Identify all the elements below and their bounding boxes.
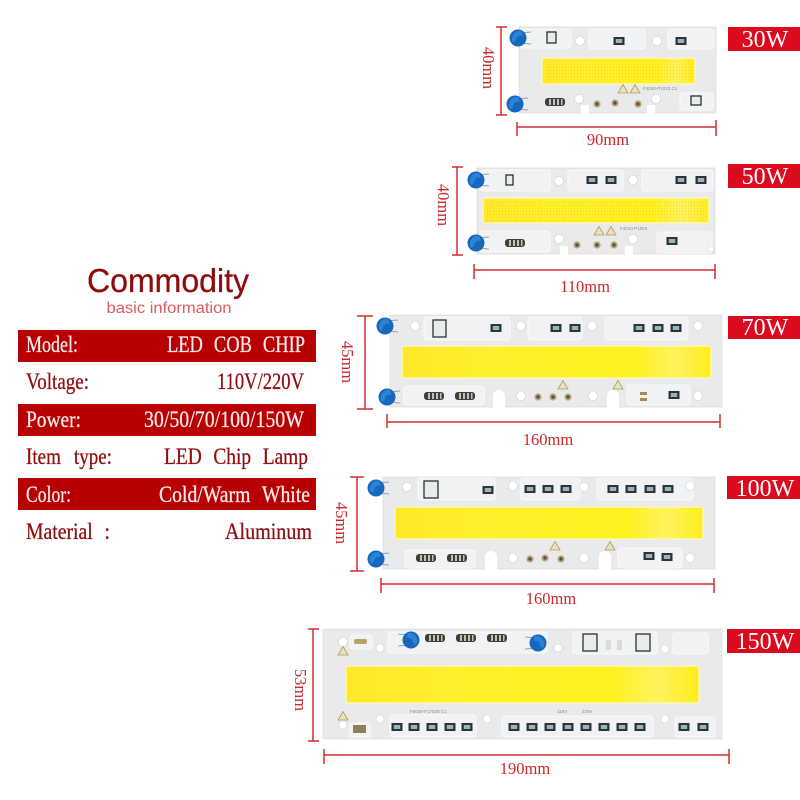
capacitors	[376, 318, 400, 406]
row: item type: LED Chip Lamp	[164, 444, 308, 469]
row: model: LED COB CHIP	[167, 332, 305, 357]
capacitors	[468, 172, 489, 252]
row: model	[18, 330, 316, 362]
panel: 100W chip	[332, 476, 800, 608]
row: power: Power:	[26, 407, 81, 432]
board	[383, 477, 715, 569]
capacitors	[368, 480, 389, 568]
dimension: width	[474, 264, 715, 296]
panel: 30W chip	[479, 27, 800, 149]
dimension: width: 110mm	[560, 277, 610, 296]
capacitors	[506, 30, 531, 112]
dimension: height: 45mm	[332, 502, 351, 544]
board	[477, 168, 715, 254]
LED strip	[346, 666, 699, 703]
power label: 70W	[742, 315, 789, 341]
row: item type: Item type:	[26, 444, 112, 469]
row: voltage: 110V/220V	[217, 369, 304, 394]
power label: 100W	[736, 476, 795, 502]
dimension: width: 90mm	[587, 130, 629, 149]
dimension: width: 160mm	[523, 430, 573, 449]
panel: 50W chip: F4010-P1063	[620, 226, 648, 231]
row: color: Color:	[26, 482, 71, 507]
row: material: Material :	[26, 519, 110, 544]
capacitors	[398, 632, 546, 652]
panel: 150W chip	[291, 629, 800, 778]
spec table	[18, 330, 316, 544]
board	[519, 27, 716, 113]
power label	[728, 164, 800, 190]
panel: 30W chip: F4030-P1023 C1	[643, 86, 678, 91]
title: Commodity	[87, 262, 249, 299]
row: material	[26, 519, 312, 544]
dimension: height: 40mm	[479, 47, 498, 89]
dimension: height: 53mm	[291, 669, 310, 711]
LED strip	[402, 346, 711, 378]
board	[323, 629, 722, 739]
row: material: Aluminum	[225, 519, 312, 544]
power label	[728, 27, 800, 53]
dimension: height	[291, 629, 319, 741]
dimension: width: 190mm	[500, 759, 550, 778]
LED strip	[395, 507, 703, 539]
row: power: 30/50/70/100/150W	[144, 407, 304, 432]
row: color	[18, 478, 316, 510]
board	[390, 315, 722, 407]
dimension: height	[479, 27, 507, 115]
dimension: height	[332, 477, 364, 571]
panel: 50W chip	[434, 164, 800, 296]
dimension: width	[517, 120, 716, 149]
row: voltage	[26, 369, 304, 394]
dimension: height	[434, 167, 463, 255]
power label: 50W	[742, 164, 789, 190]
row: color: Cold/Warm White	[159, 482, 310, 507]
LED strip	[542, 58, 695, 84]
panel: 150W chip: 110V	[557, 709, 567, 714]
power label	[728, 315, 800, 341]
row: voltage: Voltage:	[26, 369, 89, 394]
dimension: width	[324, 749, 729, 778]
row: item type	[26, 444, 308, 469]
row: power	[18, 404, 316, 436]
panel: 150W chip: F5030-F17020 C1	[410, 709, 447, 714]
panel: 70W chip	[338, 315, 800, 449]
dimension: width	[387, 414, 720, 449]
power label: 150W	[736, 629, 795, 655]
LED strip	[483, 198, 709, 223]
power label: 30W	[742, 27, 789, 53]
dimension: width: 160mm	[526, 589, 576, 608]
panel: 150W chip: 220V	[582, 709, 593, 714]
dimension: width	[381, 578, 714, 608]
dimension: height	[338, 316, 373, 409]
subtitle: basic information	[106, 300, 232, 317]
dimension: height: 40mm	[434, 184, 453, 226]
row: model: Model:	[26, 332, 78, 357]
dimension: height: 45mm	[338, 341, 357, 383]
